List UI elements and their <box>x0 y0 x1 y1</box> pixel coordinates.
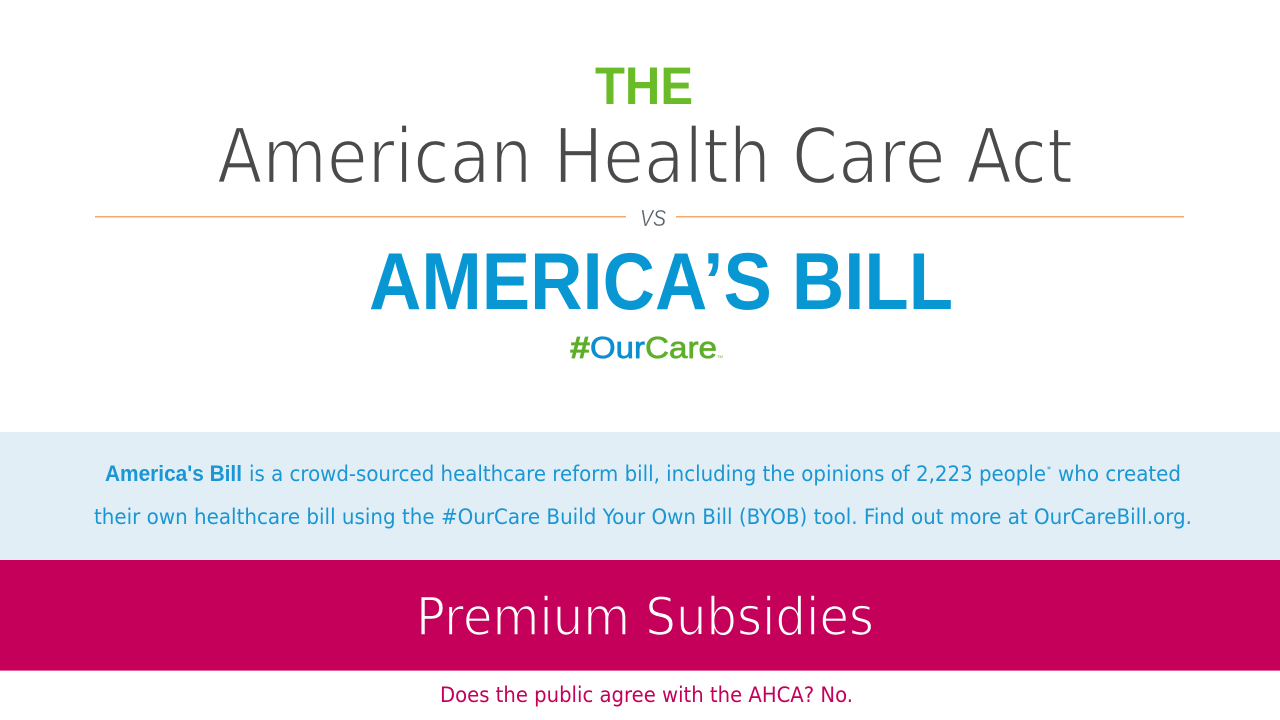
panel: introduction band <box>0 432 1280 560</box>
intro text line 1: * <box>1047 465 1051 474</box>
divider with VS: VS <box>640 205 667 231</box>
intro text line 2: their own healthcare bill using the #OurCare Build Your Own Bill (BYOB) tool. Find out more at OurCareBill.org. <box>94 505 1192 529</box>
heading: THE: THE <box>595 57 693 116</box>
logo: #OurCare: # <box>570 330 590 365</box>
heading: America's Bill: AMERICA’S BILL <box>369 237 953 327</box>
title: American Health Care Act: American Health Care Act <box>217 113 1073 202</box>
intro text line 1: who created <box>1058 462 1181 486</box>
intro text line 1: is a crowd-sourced healthcare reform bill, including the opinions of 2,223 people <box>249 462 1046 486</box>
intro text line 1: America's Bill <box>105 461 242 486</box>
panel: Premium Subsidies banner <box>0 560 1280 671</box>
logo: #OurCare: TM <box>717 354 723 359</box>
question text: Does the public agree with the AHCA? No. <box>440 683 853 707</box>
banner heading: Premium Subsidies <box>416 587 874 648</box>
logo: #OurCare: Care <box>645 330 717 365</box>
logo: #OurCare <box>570 330 723 365</box>
logo: #OurCare: Our <box>590 330 645 365</box>
